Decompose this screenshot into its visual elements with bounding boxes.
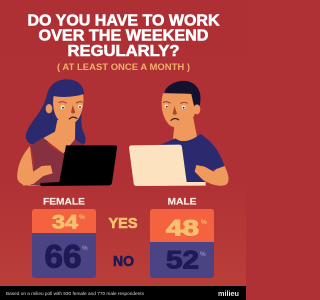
arm and hand	[195, 165, 229, 186]
female yes 34%: 34	[52, 212, 79, 234]
head	[162, 93, 196, 127]
subtitle: ( AT LEAST ONCE A MONTH )	[57, 62, 190, 73]
female yes 34%	[52, 212, 85, 234]
female no 66%: 66	[44, 238, 82, 274]
male no 52%: %	[200, 251, 206, 258]
neck and chest	[43, 120, 75, 153]
footnote: Based on a milieu poll with 930 female and 770 male respondents	[6, 291, 145, 296]
female yes 34%: %	[79, 214, 85, 221]
male no 52%: 52	[166, 246, 199, 274]
forearm and hand	[21, 165, 53, 186]
label: no: NO	[113, 253, 134, 270]
footer bar	[0, 286, 246, 300]
column label: female: FEMALE	[43, 196, 85, 208]
face features	[163, 102, 188, 121]
title	[28, 12, 220, 60]
illustration: woman at laptop	[17, 79, 117, 186]
logo: milieu	[218, 291, 239, 298]
ear	[46, 104, 52, 113]
eyes and brows	[59, 102, 83, 119]
male yes 48%: %	[201, 219, 207, 226]
title: OVER THE WEEKEND	[38, 28, 208, 44]
panel: female results	[32, 209, 96, 278]
panel: male results	[150, 209, 214, 278]
upper arm	[17, 146, 50, 186]
male yes 48%: 48	[166, 216, 199, 240]
hair	[164, 81, 201, 111]
shirt	[160, 134, 225, 183]
male yes 48%	[166, 216, 207, 240]
label: yes: YES	[108, 215, 138, 232]
title: DO YOU HAVE TO WORK	[28, 12, 220, 30]
dress	[30, 138, 83, 185]
hair	[26, 79, 86, 145]
laptop	[40, 145, 117, 186]
column label: male: MALE	[168, 196, 196, 208]
illustration: man at laptop	[129, 81, 229, 186]
title: REGULARLY?	[68, 43, 180, 60]
male no 52%	[166, 246, 206, 274]
fringe	[53, 79, 84, 97]
female no 66%: %	[82, 245, 88, 252]
laptop	[129, 145, 206, 186]
face	[53, 94, 83, 125]
ear	[194, 104, 200, 114]
neck	[173, 117, 197, 145]
